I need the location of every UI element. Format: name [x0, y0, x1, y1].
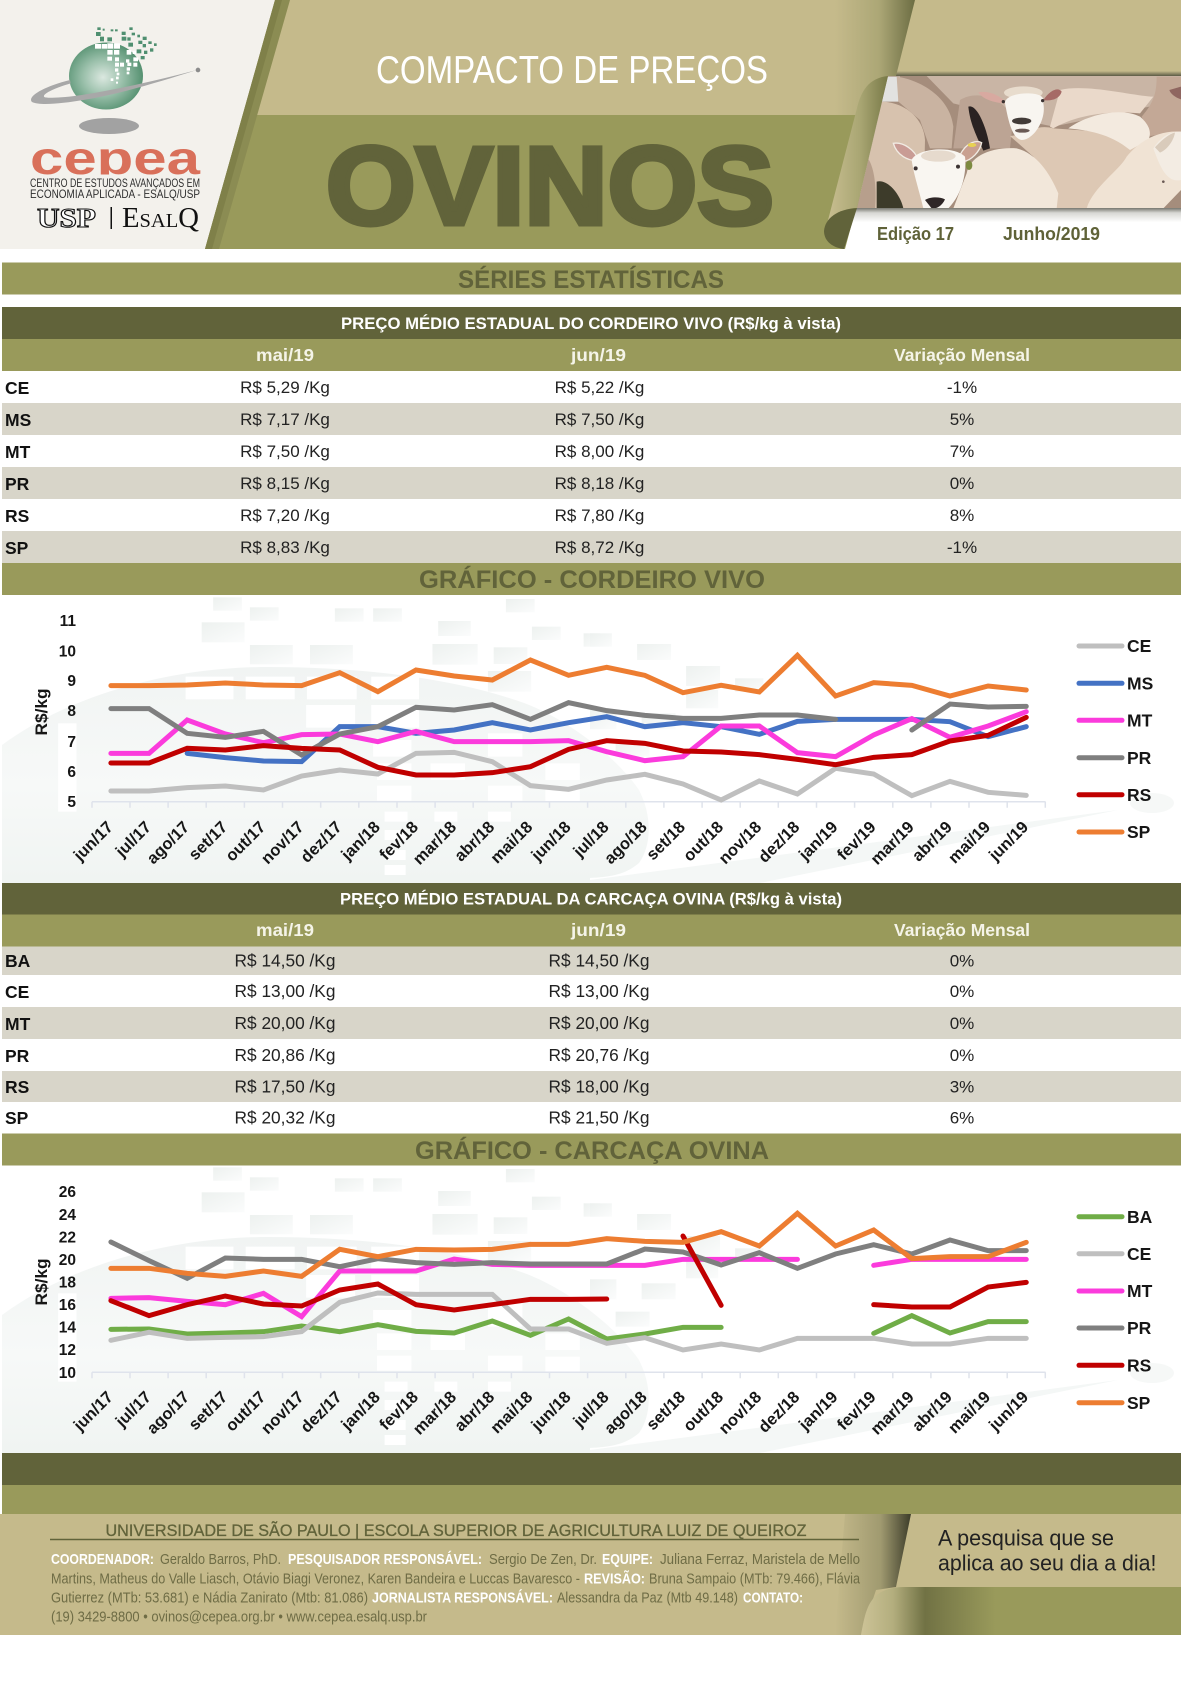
row: SP: R$ 8,72 /Kg — [555, 538, 644, 557]
footer slogan: aplica ao seu dia a dia! — [938, 1550, 1156, 1576]
series SP — [111, 1213, 1026, 1276]
x axis labels: out/17 — [222, 818, 269, 865]
y axis labels: 24 — [59, 1207, 76, 1224]
row: MS: R$ 7,17 /Kg — [240, 410, 330, 429]
y axis title: R$/kg — [32, 689, 51, 735]
cepea subtitle — [30, 178, 200, 201]
y axis labels: 6 — [67, 764, 76, 781]
table column headers: Variação Mensal — [894, 345, 1030, 365]
legend PR — [1079, 1318, 1152, 1338]
row: RS: 3% — [950, 1078, 974, 1096]
legend SP — [1079, 822, 1151, 842]
table column headers: mai/19 — [256, 345, 314, 365]
footer credits: PESQUISADOR RESPONSÁVEL: — [288, 1551, 482, 1568]
x axis labels: set/17 — [185, 818, 231, 864]
y axis labels: 26 — [59, 1184, 76, 1201]
row: RS: R$ 17,50 /Kg — [235, 1076, 335, 1096]
footer credits: EQUIPE: — [602, 1551, 653, 1568]
x axis labels: ago/17 — [143, 1388, 193, 1438]
row: BA: 0% — [950, 952, 974, 970]
x axis labels: mar/19 — [867, 1388, 918, 1438]
footer credits: COORDENADOR: — [51, 1551, 154, 1568]
x axis labels: jan/18 — [337, 1388, 384, 1435]
row: RS: R$ 7,20 /Kg — [240, 506, 330, 525]
x axis labels: jun/18 — [527, 1388, 575, 1435]
row: RS: RS — [5, 1077, 29, 1097]
y axis labels: 20 — [59, 1252, 76, 1269]
x axis labels: ago/18 — [601, 818, 651, 868]
row: MT: MT — [5, 1014, 31, 1034]
header banner — [0, 0, 1181, 249]
y axis labels: 16 — [59, 1297, 76, 1314]
table column headers — [2, 914, 1181, 946]
series RS segment 2 — [683, 1236, 721, 1305]
USP and ESALQ logos — [37, 203, 199, 234]
row: RS — [5, 506, 974, 526]
row: MT: R$ 20,00 /Kg — [235, 1013, 335, 1033]
row: MS: MS — [5, 410, 31, 430]
header top right tan panel — [895, 0, 1181, 75]
legend MT — [1079, 710, 1153, 730]
y axis labels: 7 — [67, 734, 76, 751]
legend CE: CE — [1127, 636, 1151, 656]
x axis labels: jan/18 — [337, 818, 384, 865]
row: MT: MT — [5, 442, 31, 462]
x axis — [92, 1372, 1046, 1378]
y axis labels: 10 — [59, 644, 76, 660]
chart background watermark: carcaca ovina — [2, 1167, 1174, 1453]
row: MS — [2, 403, 1181, 435]
cepea subtitle: CENTRO DE ESTUDOS AVANÇADOS EM — [30, 178, 200, 190]
row: SP: R$ 20,32 /Kg — [235, 1108, 335, 1128]
row: PR: PR — [5, 1046, 30, 1066]
table column headers: jun/19 — [570, 920, 626, 940]
legend PR — [1079, 748, 1152, 768]
legend RS: RS — [1127, 785, 1151, 805]
footer credits — [51, 1551, 861, 1626]
section heading: grafico cordeiro vivo: GRÁFICO - CORDEIRO VIVO — [419, 565, 765, 594]
row: PR: R$ 8,15 /Kg — [240, 474, 330, 493]
row: CE — [5, 378, 977, 398]
header fold shadow — [835, 0, 915, 115]
row: MT: 7% — [950, 442, 974, 461]
legend CE — [1079, 636, 1151, 656]
y axis labels: 18 — [59, 1274, 76, 1292]
row: MS: 5% — [950, 410, 974, 429]
x axis labels: out/17 — [222, 1388, 269, 1435]
footer credits: Sergio De Zen, Dr. — [489, 1551, 597, 1568]
series BA — [111, 1319, 721, 1339]
row: PR: PR — [5, 474, 30, 494]
footer credits: Martins, Matheus do Valle Liasch, Otávio Biagi Veronez, Karen Bandeira e Luccas Bavaresco - — [51, 1570, 580, 1588]
empty olive band — [2, 1485, 1181, 1514]
x axis labels: nov/18 — [716, 1388, 765, 1438]
white edition strip — [845, 208, 1181, 249]
table: carcaca ovina — [2, 883, 1181, 1128]
x axis labels: mar/18 — [410, 818, 460, 868]
row: BA — [2, 946, 1181, 975]
x axis labels: set/18 — [643, 1388, 689, 1434]
y axis labels: 11 — [60, 613, 76, 630]
page curl bottom — [824, 208, 857, 249]
footer heading: UNIVERSIDADE DE SÃO PAULO | ESCOLA SUPERIOR DE AGRICULTURA LUIZ DE QUEIROZ — [106, 1521, 806, 1540]
legend BA: BA — [1127, 1207, 1153, 1227]
table: cordeiro vivo — [2, 307, 1181, 563]
table column headers: jun/19 — [570, 345, 626, 365]
y axis labels — [59, 1184, 76, 1382]
footer credits: (19) 3429-8800 • ovinos@cepea.org.br • www.cepea.esalq.usp.br — [51, 1608, 427, 1626]
legend PR: PR — [1127, 748, 1152, 768]
x axis labels: jun/17 — [70, 818, 117, 865]
line chart: cordeiro vivo — [32, 613, 1153, 868]
USP and ESALQ logos: ESALQ — [122, 203, 199, 234]
y axis title: R$/kg — [32, 1259, 51, 1305]
x axis labels: mai/18 — [487, 818, 536, 867]
series PR — [111, 1240, 1026, 1278]
footer credits: JORNALISTA RESPONSÁVEL: — [372, 1590, 553, 1606]
logo panel — [0, 0, 275, 249]
x axis labels: set/18 — [643, 818, 689, 864]
chart background watermark: cordeiro vivo — [2, 597, 1174, 883]
row: CE: CE — [5, 982, 29, 1002]
row: RS: 8% — [950, 506, 974, 525]
section heading: grafico carcaca ovina — [2, 1134, 1181, 1166]
row: RS: RS — [5, 506, 29, 526]
y axis labels: 10 — [59, 1365, 76, 1382]
x axis labels: dez/18 — [755, 1388, 803, 1437]
x axis labels: dez/17 — [297, 818, 346, 867]
x axis labels: fev/19 — [834, 818, 880, 864]
legend MT: MT — [1127, 1281, 1153, 1301]
row: MS: R$ 7,50 /Kg — [555, 410, 644, 429]
row: SP: SP — [5, 538, 29, 558]
row: BA: R$ 14,50 /Kg — [235, 950, 335, 970]
row: PR: R$ 8,18 /Kg — [555, 474, 644, 493]
series RS — [111, 1284, 607, 1316]
legend CE: CE — [1127, 1244, 1151, 1264]
series MT continued — [874, 1259, 1026, 1265]
table title — [2, 883, 1181, 914]
legend BA — [1079, 1207, 1153, 1227]
y axis labels — [59, 613, 76, 811]
x axis labels: jun/17 — [70, 1388, 117, 1435]
series CE — [111, 1293, 1026, 1350]
footer credits: Bruna Sampaio (MTb: 79.466), Flávia — [649, 1570, 861, 1588]
x axis labels: ago/18 — [601, 1388, 651, 1438]
legend SP — [1079, 1393, 1151, 1413]
row: PR: R$ 20,76 /Kg — [549, 1045, 649, 1065]
x axis labels: out/18 — [680, 818, 727, 865]
series RS — [111, 717, 1026, 775]
row: CE: R$ 5,29 /Kg — [240, 378, 330, 397]
series BA continued — [874, 1316, 1026, 1333]
row: SP — [2, 531, 1181, 563]
series CE — [111, 752, 1026, 800]
y axis labels: 22 — [59, 1230, 76, 1246]
series SP — [111, 655, 1026, 696]
row: MT — [2, 1007, 1181, 1039]
row: SP: 6% — [950, 1108, 974, 1128]
footer slogan — [938, 1526, 1156, 1576]
row: SP — [5, 1108, 974, 1128]
x axis labels: jul/18 — [569, 818, 613, 861]
legend SP: SP — [1127, 1393, 1151, 1413]
series RS segment 3 — [874, 1282, 1026, 1307]
x axis labels: mai/19 — [945, 1388, 994, 1437]
row: PR — [5, 1045, 974, 1066]
row: SP: -1% — [947, 538, 977, 557]
table title — [2, 307, 1181, 339]
x axis labels: fev/18 — [376, 1388, 422, 1434]
row: MT: 0% — [950, 1014, 974, 1033]
table title: PREÇO MÉDIO ESTADUAL DO CORDEIRO VIVO (R$/kg à vista) — [341, 314, 841, 333]
legend — [1079, 1207, 1153, 1413]
row: SP: R$ 21,50 /Kg — [549, 1108, 649, 1128]
footer curl band — [861, 1587, 1181, 1635]
empty dark band — [2, 1453, 1181, 1485]
x axis labels: mar/19 — [867, 818, 918, 868]
edition date: Junho/2019 — [1003, 224, 1100, 244]
series MT — [111, 1259, 797, 1317]
legend MT: MT — [1127, 710, 1153, 730]
footer credits: Geraldo Barros, PhD. — [160, 1551, 281, 1568]
x axis labels: jul/17 — [112, 818, 155, 861]
legend CE — [1079, 1244, 1151, 1264]
row: PR: 0% — [950, 474, 974, 493]
row: CE: 0% — [950, 982, 974, 1001]
row: CE: R$ 13,00 /Kg — [235, 981, 335, 1001]
footer background — [0, 1514, 1181, 1635]
row: CE: CE — [5, 378, 29, 398]
data lines — [111, 655, 1026, 800]
row: RS — [2, 1071, 1181, 1102]
table column headers: mai/19 — [256, 920, 314, 940]
title: compacto de precos: COMPACTO DE PREÇOS — [376, 49, 768, 92]
globe shadow — [79, 118, 139, 134]
cepea subtitle: ECONOMIA APLICADA - ESALQ/USP — [30, 189, 200, 201]
row: SP: SP — [5, 1108, 29, 1128]
legend MS: MS — [1127, 674, 1153, 694]
row: MT — [5, 442, 974, 462]
table title: PREÇO MÉDIO ESTADUAL DA CARCAÇA OVINA (R$/kg à vista) — [340, 890, 842, 908]
series MT — [111, 712, 1026, 761]
x axis labels: nov/18 — [716, 818, 765, 868]
x axis labels: abr/19 — [909, 818, 956, 865]
section heading: series estatisticas: SÉRIES ESTATÍSTICAS — [458, 265, 724, 294]
x axis labels: jun/19 — [985, 1388, 1032, 1435]
row: RS: R$ 7,80 /Kg — [555, 506, 644, 525]
legend RS — [1079, 785, 1151, 805]
x axis labels: abr/19 — [909, 1388, 956, 1435]
legend MS — [1079, 674, 1153, 694]
header olive band — [200, 115, 860, 249]
legend MT — [1079, 1281, 1153, 1301]
x axis labels: jan/19 — [795, 818, 841, 865]
row: CE — [5, 981, 974, 1002]
y axis labels: 14 — [59, 1320, 76, 1336]
legend SP: SP — [1127, 822, 1151, 842]
x axis labels: jul/18 — [569, 1388, 613, 1431]
legend RS — [1079, 1356, 1151, 1376]
row: PR: R$ 20,86 /Kg — [235, 1045, 335, 1065]
y axis labels: 9 — [67, 673, 76, 690]
footer — [0, 1514, 1181, 1635]
row: PR — [2, 467, 1181, 499]
footer fold shadow — [835, 1514, 911, 1635]
series PR — [111, 703, 836, 755]
footer credits: Alessandra da Paz (Mtb 49.148) — [557, 1590, 738, 1606]
x axis labels: mai/18 — [487, 1388, 536, 1437]
page curl top — [826, 76, 888, 228]
row: RS: R$ 18,00 /Kg — [549, 1076, 649, 1096]
section heading: grafico cordeiro vivo — [2, 563, 1181, 595]
y axis labels: 8 — [67, 703, 76, 720]
footer credits: Juliana Ferraz, Maristela de Mello — [660, 1551, 860, 1568]
footer credits: REVISÃO: — [584, 1570, 645, 1588]
footer credits: CONTATO: — [743, 1590, 803, 1606]
logo globe — [31, 27, 200, 110]
row: CE: R$ 5,22 /Kg — [555, 378, 644, 397]
row: CE: -1% — [947, 378, 977, 397]
photo top shadow — [893, 71, 1181, 76]
x axis labels: dez/17 — [297, 1388, 346, 1437]
section heading: series estatisticas — [2, 262, 1181, 294]
y axis labels: 12 — [59, 1342, 76, 1359]
x axis labels: nov/17 — [258, 818, 308, 868]
x axis — [92, 802, 1046, 808]
x axis labels: mar/18 — [410, 1388, 460, 1438]
series MS — [187, 717, 1026, 762]
row: MT: R$ 8,00 /Kg — [555, 442, 644, 461]
x axis labels: mai/19 — [945, 818, 994, 867]
cepea logotype: cepea — [30, 132, 201, 184]
x axis labels — [70, 1388, 1032, 1438]
header tan band — [200, 0, 920, 115]
x axis labels: jun/19 — [985, 818, 1032, 865]
legend RS: RS — [1127, 1356, 1151, 1376]
title: ovinos: OVINOS — [326, 125, 774, 248]
x axis labels: nov/17 — [258, 1388, 308, 1438]
row: BA: R$ 14,50 /Kg — [549, 950, 649, 970]
footer slogan: A pesquisa que se — [938, 1526, 1114, 1550]
x axis labels: jun/18 — [527, 818, 575, 865]
line chart: carcaca ovina — [32, 1184, 1153, 1438]
x axis labels: abr/18 — [451, 818, 498, 865]
x axis labels: dez/18 — [755, 818, 803, 867]
photo: sheep — [850, 72, 1181, 212]
legend — [1079, 636, 1153, 842]
row: PR: 0% — [950, 1046, 974, 1065]
y axis labels: 5 — [67, 794, 76, 811]
x axis labels: jul/17 — [112, 1388, 155, 1431]
x axis labels: fev/18 — [376, 818, 422, 864]
logo fold strip — [205, 0, 290, 249]
row: SP: R$ 8,83 /Kg — [240, 538, 330, 557]
footer credits: Gutierrez (MTb: 53.681) e Nádia Zanirato (Mtb: 81.086) — [51, 1590, 368, 1606]
row: MT: R$ 7,50 /Kg — [240, 442, 330, 461]
table column headers — [2, 339, 1181, 371]
row: MT: R$ 20,00 /Kg — [549, 1013, 649, 1033]
section heading: grafico carcaca ovina: GRÁFICO - CARCAÇA OVINA — [415, 1136, 769, 1165]
x axis labels: ago/17 — [143, 818, 193, 868]
row: CE: R$ 13,00 /Kg — [549, 981, 649, 1001]
series PR continued — [912, 704, 1026, 730]
table column headers: Variação Mensal — [894, 920, 1030, 940]
data lines — [111, 1213, 1026, 1350]
row: BA: BA — [5, 951, 31, 971]
legend PR: PR — [1127, 1318, 1152, 1338]
edition number: Edição 17 — [877, 224, 954, 244]
x axis labels — [70, 818, 1032, 868]
x axis labels: jan/19 — [795, 1388, 841, 1435]
x axis labels: out/18 — [680, 1388, 727, 1435]
USP and ESALQ logos: USP — [37, 203, 96, 233]
x axis labels: set/17 — [185, 1388, 231, 1434]
x axis labels: fev/19 — [834, 1388, 880, 1434]
x axis labels: abr/18 — [451, 1388, 498, 1435]
